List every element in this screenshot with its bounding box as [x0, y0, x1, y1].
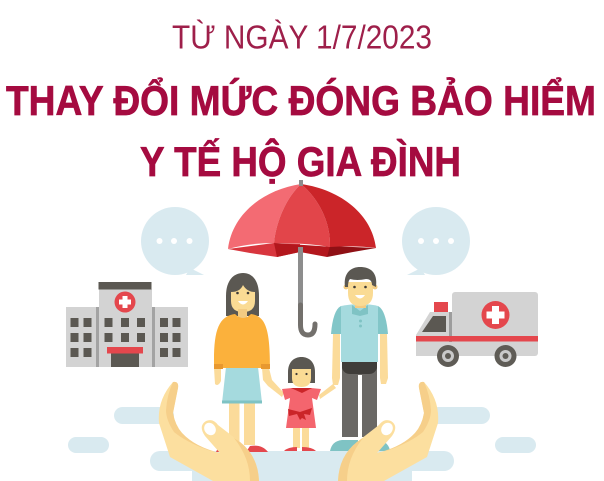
icon: right speech bubble: [402, 207, 470, 275]
figure: woman: [214, 273, 284, 452]
icon: left hand: [159, 382, 259, 481]
icon: right hand: [338, 382, 438, 481]
icon: umbrella: [228, 180, 376, 335]
title line 2: Y TẾ HỘ GIA ĐÌNH: [140, 137, 461, 185]
icon: hospital: [66, 282, 188, 367]
figure: man: [330, 267, 390, 451]
figure: child: [282, 357, 336, 451]
icon: left speech bubble: [141, 207, 209, 275]
date heading: TỪ NGÀY 1/7/2023: [172, 18, 432, 56]
background cloud bars: [68, 407, 536, 481]
icon: ambulance: [416, 292, 538, 367]
